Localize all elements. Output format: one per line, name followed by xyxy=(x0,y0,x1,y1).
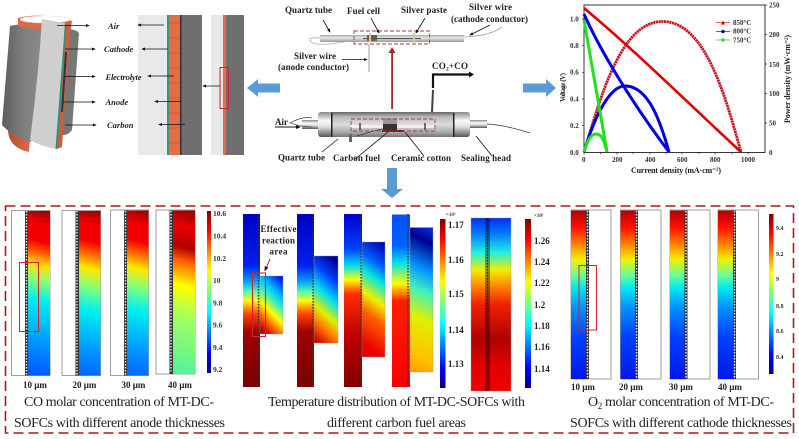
panel: simulation results frame xyxy=(6,206,794,433)
colour bar: 8.8 xyxy=(776,304,784,310)
colour bar: 9 xyxy=(776,277,779,283)
panel: temperature distribution xyxy=(243,212,550,431)
colour bar: 9.4 xyxy=(776,226,784,232)
axis tick labels: 0.4 xyxy=(570,96,579,104)
heatmap: 20 um cathode xyxy=(620,210,661,379)
colour bar: 10 xyxy=(213,276,221,285)
panel: fuel cell quartz tube: Silver wire xyxy=(294,51,336,61)
axis tick labels: 800 xyxy=(710,156,721,164)
colour bar xyxy=(440,212,464,388)
colour bar: 8.6 xyxy=(776,329,784,335)
layer labels: Carbon xyxy=(107,120,134,130)
axis tick labels: 0.2 xyxy=(570,122,579,130)
legend: 850°C xyxy=(733,19,751,27)
axis titles: Current density (mA·cm⁻²) xyxy=(631,166,721,175)
thickness labels: 20 µm xyxy=(72,380,97,390)
colour bar: 1.18 xyxy=(534,321,550,331)
thickness labels: 30 µm xyxy=(122,380,146,390)
icon: tubular cell cutaway xyxy=(2,16,79,152)
highlight box xyxy=(20,262,38,332)
heatmap: 40 um anode xyxy=(156,210,195,374)
layer labels: Air xyxy=(107,21,120,31)
axis tick labels: 1000 xyxy=(741,156,756,164)
colour bar: 1.15 xyxy=(448,289,464,299)
axis tick labels: 400 xyxy=(645,156,656,164)
heatmap: fourth fuel area xyxy=(392,214,433,387)
axis tick labels: 150 xyxy=(769,61,780,69)
heatmap: smallest fuel area xyxy=(243,214,283,387)
legend: 800°C xyxy=(733,28,751,36)
panel: O2 concentration xyxy=(570,210,792,431)
colour bar: 1.17 xyxy=(448,220,464,230)
axis tick labels: 0 xyxy=(582,156,586,164)
axis titles xyxy=(559,35,792,175)
thickness labels: 10 µm xyxy=(571,382,595,392)
thickness labels: 30 µm xyxy=(669,382,693,392)
colour bar: 1.16 xyxy=(534,342,550,352)
caption: SOFCs with different cathode thicknesses xyxy=(570,416,792,431)
caption: molar concentration of MT-DC- xyxy=(602,395,774,410)
panel: reactor assembly: +CO xyxy=(449,61,468,71)
caption xyxy=(268,395,525,431)
panel: cell structure schematic xyxy=(2,15,244,155)
layer labels: Anode xyxy=(104,97,128,107)
colour bar: 9.2 xyxy=(776,252,784,258)
panel: reactor assembly: Quartz tube xyxy=(278,152,325,162)
chart: voltage and power density curves xyxy=(559,2,792,175)
legend xyxy=(716,19,751,44)
heatmap: third fuel area xyxy=(344,214,385,387)
caption xyxy=(570,395,792,431)
panel: fuel cell quartz tube: (anode conductor) xyxy=(278,62,349,72)
colour bar xyxy=(207,209,226,374)
layer labels xyxy=(104,21,142,130)
highlight box xyxy=(579,266,596,330)
heatmap: 30 um cathode xyxy=(670,210,710,379)
axis tick labels: 0.6 xyxy=(570,68,579,76)
panel: fuel cell quartz tube: (cathode conductor) xyxy=(451,14,528,24)
axis tick labels: 50 xyxy=(769,120,776,128)
thickness labels xyxy=(23,380,192,390)
axis tick labels: 200 xyxy=(769,31,780,39)
panel: fuel cell quartz tube xyxy=(278,2,528,72)
panel: fuel cell quartz tube: Silver wire xyxy=(469,2,512,12)
caption: CO molar concentration of MT-DC- xyxy=(24,395,214,410)
panel: fuel cell quartz tube: Quartz tube xyxy=(285,5,332,15)
colour bar: 1.16 xyxy=(448,255,464,265)
thickness labels: 20 µm xyxy=(619,382,643,392)
colour bar: 10.2 xyxy=(213,254,226,263)
panel: enlarged layer section xyxy=(138,15,202,155)
colour bar: 10.6 xyxy=(213,209,226,218)
colour bar: 8.4 xyxy=(776,355,784,361)
heatmap: 20 um anode xyxy=(62,210,100,376)
colour bar: 1.14 xyxy=(534,364,550,374)
colour bar xyxy=(525,213,550,388)
thickness labels: 10 µm xyxy=(23,380,47,390)
panel: reactor assembly: CO xyxy=(432,61,446,71)
arrow: blue left xyxy=(247,79,280,97)
colour bar: 10.4 xyxy=(213,232,226,240)
caption xyxy=(14,395,225,431)
highlight box and annotation xyxy=(252,224,296,336)
thickness labels: 40 µm xyxy=(168,380,192,390)
colour bar: 9.4 xyxy=(213,343,223,352)
colour bar: 9.6 xyxy=(213,320,223,330)
layer labels: Cathode xyxy=(104,44,134,54)
heatmap: second fuel area xyxy=(297,214,338,387)
axis titles: Voltage (V) xyxy=(559,72,567,102)
caption: Temperature distribution of MT-DC-SOFCs with xyxy=(268,395,525,410)
colour bar xyxy=(769,214,784,374)
axis tick labels xyxy=(570,2,780,164)
axis tick labels: 1.0 xyxy=(570,16,579,24)
highlight box and annotation: Effective xyxy=(260,224,296,234)
layer labels: Electrolyte xyxy=(104,72,142,82)
axis tick labels: 100 xyxy=(769,90,780,98)
caption: 2 xyxy=(598,401,602,411)
panel: reactor assembly: Ceramic cotton xyxy=(391,153,451,163)
highlight box and annotation: area xyxy=(270,246,288,256)
colour bar: ×10³ xyxy=(446,212,456,218)
panel: reactor assembly xyxy=(275,61,530,163)
colour bar: 1.24 xyxy=(534,257,550,267)
colour bar: 1.14 xyxy=(448,325,464,335)
axis tick labels: 200 xyxy=(612,156,623,164)
axis tick labels: 250 xyxy=(769,2,780,10)
colour bar: 9.8 xyxy=(213,298,223,308)
panel: full layer section xyxy=(211,15,244,155)
heatmap: 40 um cathode xyxy=(718,210,758,379)
axis tick labels: 0.8 xyxy=(570,42,579,50)
arrow: blue right xyxy=(523,79,556,97)
colour bar: 9.2 xyxy=(213,365,223,374)
thickness labels xyxy=(571,382,742,392)
panel: reactor assembly: Sealing head xyxy=(461,153,511,163)
panel: reactor assembly: Carbon fuel xyxy=(333,153,380,163)
heatmap: full fuel area xyxy=(471,218,511,391)
caption: different carbon fuel areas xyxy=(327,416,466,431)
colour bar: 1.13 xyxy=(448,359,464,369)
caption: O xyxy=(588,395,598,410)
panel: CO concentration xyxy=(12,209,226,431)
colour bar: 1.26 xyxy=(534,236,550,246)
axis tick labels: 600 xyxy=(677,156,688,164)
highlight box and annotation: reaction xyxy=(262,236,295,246)
axis titles: Power density (mW·cm⁻²) xyxy=(783,35,792,123)
panel: fuel cell quartz tube: Silver paste xyxy=(401,5,447,15)
colour bar: 1.2 xyxy=(534,300,546,310)
panel: reactor assembly: Air xyxy=(275,117,288,127)
panel: fuel cell quartz tube: Fuel cell xyxy=(347,6,380,16)
arrow: red up xyxy=(388,47,396,109)
heatmap: 10 um cathode xyxy=(571,210,611,379)
thickness labels: 40 µm xyxy=(718,382,742,392)
arrow: blue down xyxy=(381,168,403,198)
axis tick labels: 0 xyxy=(769,149,773,157)
panel: reactor assembly: 2 xyxy=(446,66,449,72)
axis tick labels: 0.0 xyxy=(570,149,579,157)
heatmap: 30 um anode xyxy=(110,210,148,376)
colour bar: ×10³ xyxy=(534,213,544,219)
heatmap: 10 um anode xyxy=(12,210,50,376)
colour bar: 1.22 xyxy=(534,278,550,288)
caption: SOFCs with different anode thicknesses xyxy=(14,416,225,431)
label arrows xyxy=(57,25,220,125)
legend: 750°C xyxy=(733,36,751,44)
